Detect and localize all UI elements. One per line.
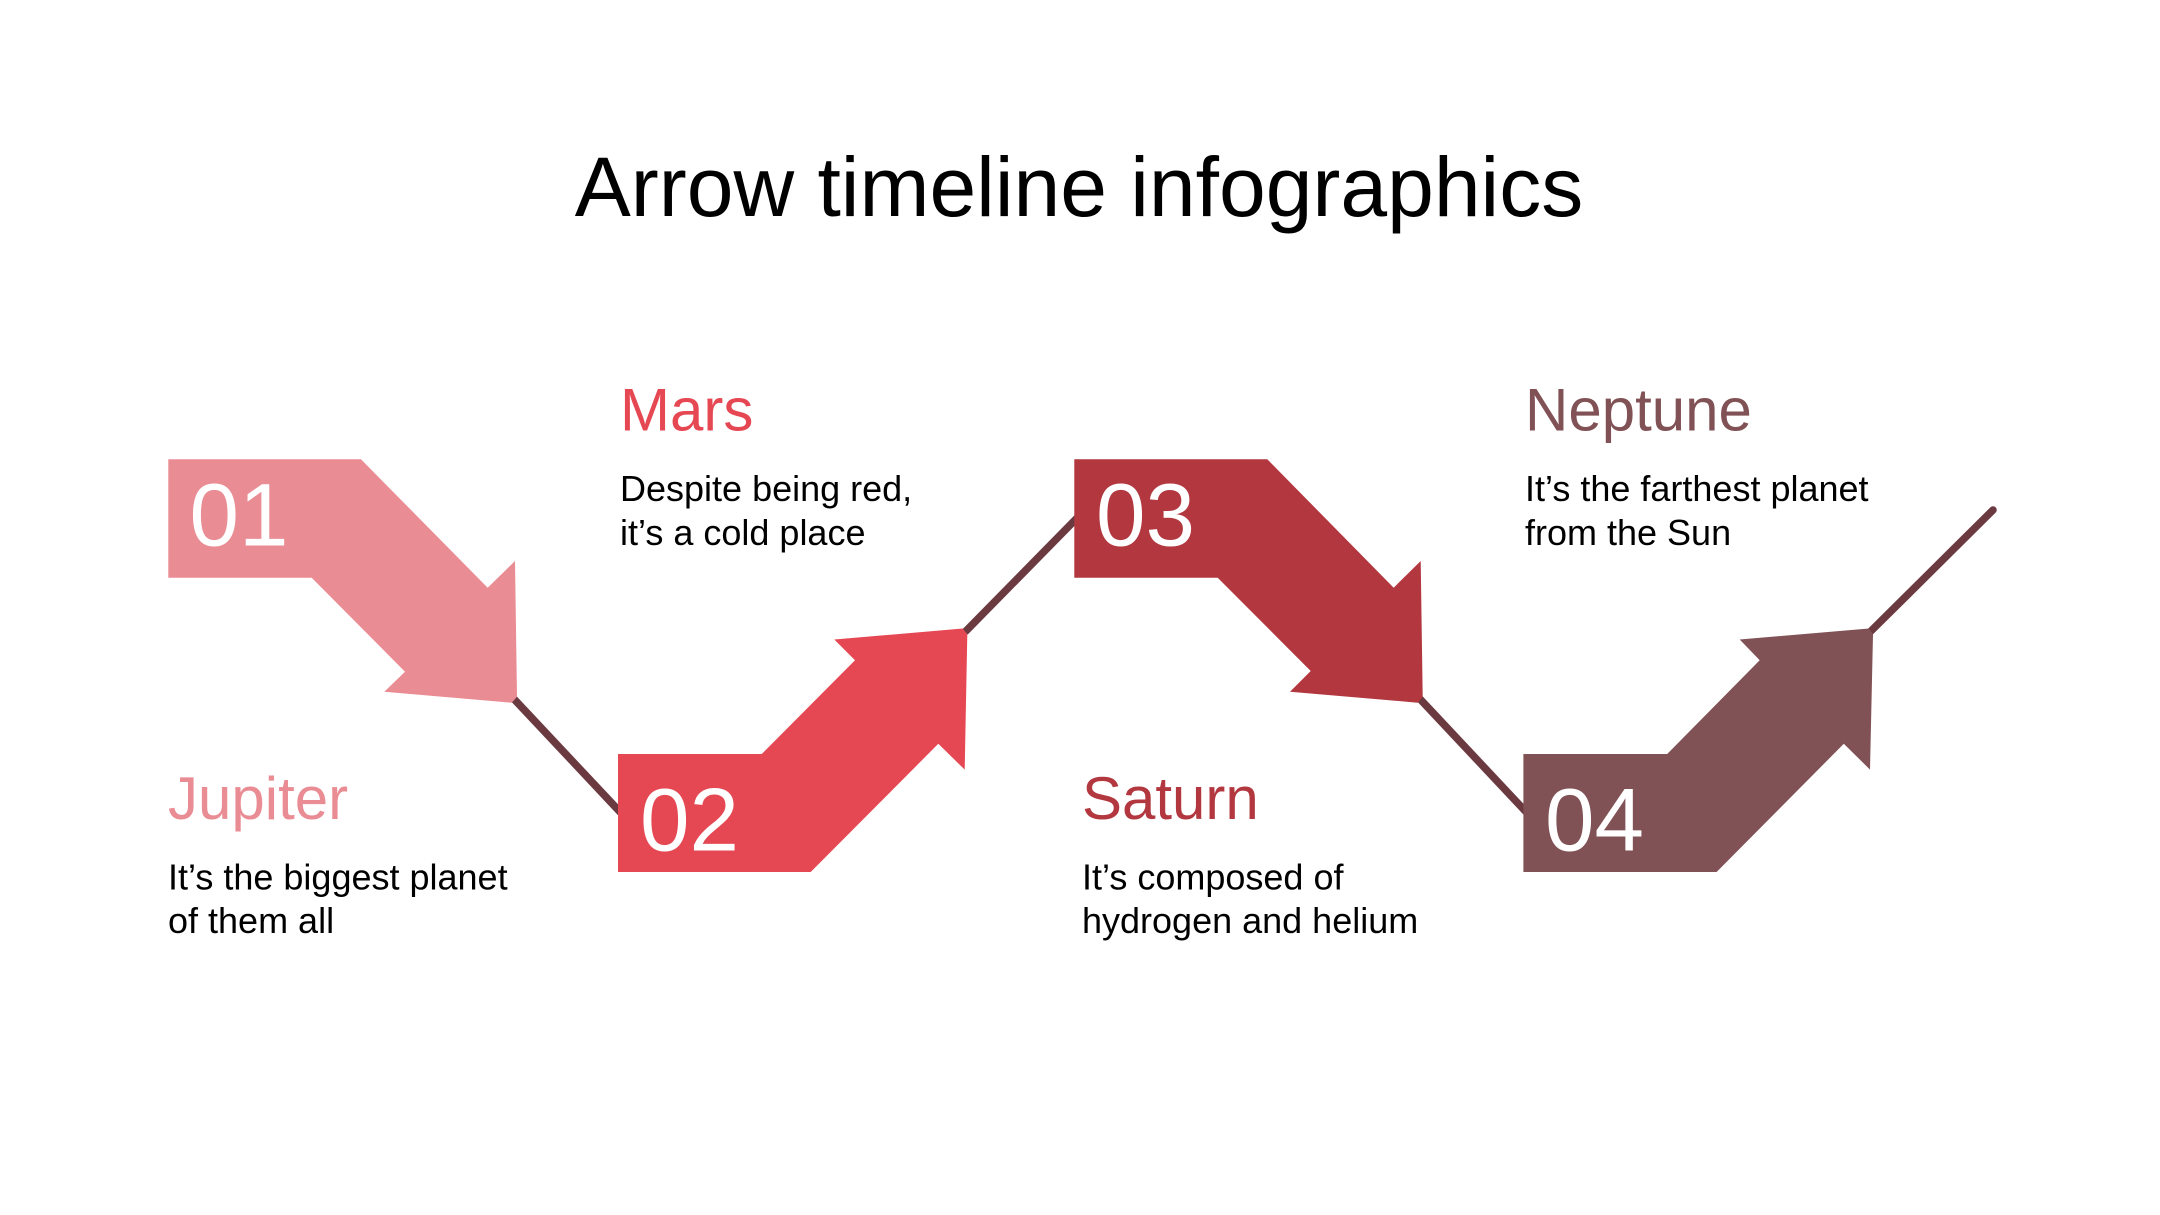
connector: 01 to 02 [514, 699, 622, 814]
text block: Saturn [1082, 765, 1418, 941]
description: Saturn: hydrogen and helium [1082, 900, 1418, 941]
description: Jupiter: It’s the biggest planet [168, 856, 508, 898]
number 04: 04 [1545, 770, 1644, 870]
number 01: 01 [190, 464, 288, 564]
number 03: 03 [1096, 464, 1195, 564]
heading: Mars: Mars [620, 376, 753, 444]
description: Mars: it’s a cold place [620, 512, 865, 553]
step 02 arrow [618, 628, 967, 872]
step 01 arrow [168, 459, 517, 703]
description: Neptune: from the Sun [1525, 512, 1731, 553]
description: Neptune: It’s the farthest planet [1525, 468, 1869, 509]
title: Arrow timeline infographics [575, 140, 1583, 234]
heading: Saturn: Saturn [1082, 765, 1259, 832]
step 04 arrow [1523, 628, 1873, 872]
description: Jupiter: of them all [168, 900, 334, 941]
number 02: 02 [640, 770, 739, 870]
step 03 arrow [1074, 459, 1423, 703]
description: Mars: Despite being red, [620, 468, 912, 509]
connector: 02 to 03 [965, 517, 1078, 632]
heading: Neptune: Neptune [1525, 376, 1752, 444]
connector: 03 to 04 [1420, 699, 1528, 814]
description: Saturn: It’s composed of [1082, 856, 1343, 898]
text block: Neptune [1525, 376, 1869, 553]
connector: 04 to end [1870, 510, 1993, 632]
heading: Jupiter: Jupiter [168, 765, 348, 832]
text block: Mars [620, 376, 912, 553]
text block: Jupiter [168, 765, 508, 941]
